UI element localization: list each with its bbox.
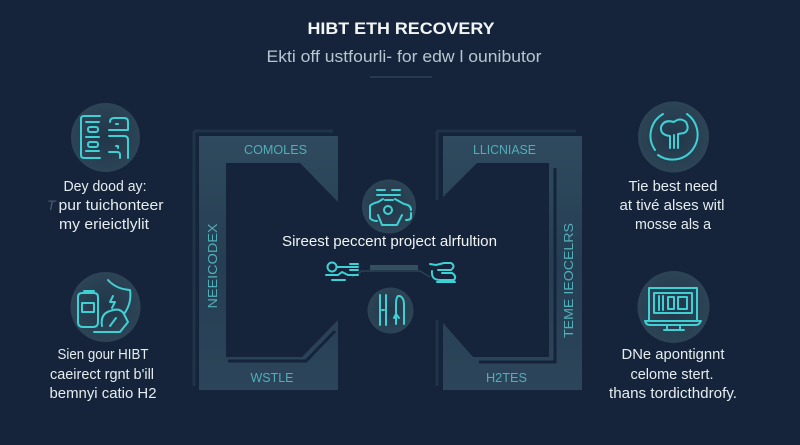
text: top left: pur tuichonteer (58, 197, 164, 214)
text: bottom left (50, 346, 156, 402)
text: bottom left: Sien gour HIBT (58, 346, 148, 363)
icon: server racks (71, 103, 140, 172)
label: right side: TEME IEOCELRS (561, 223, 576, 338)
text: bottom left: caeirect rgnt b'ill (50, 366, 154, 383)
left bracket panel (194, 131, 338, 390)
subtitle: Ekti off ustfourli- for edw l ounibutor (266, 47, 542, 66)
center text: Sireest peccent project alrfultion (282, 233, 497, 250)
icon: circular head (638, 102, 709, 172)
title: HIBT ETH RECOVERY (308, 20, 494, 38)
text: bottom right: DNe apontignnt (622, 346, 725, 363)
text: bottom right (609, 346, 737, 402)
text: bottom right: celome stert. (630, 366, 714, 383)
icon: bottom bars (368, 288, 414, 334)
text: top right (620, 178, 724, 233)
text: top left: Dey dood ay: (64, 178, 146, 195)
connector line (352, 268, 430, 277)
text: top left: T (47, 197, 57, 213)
icon: key left (326, 262, 358, 280)
label: bottom left: WSTLE (250, 370, 294, 385)
text: top right: mosse als a (635, 216, 712, 233)
text: top right: Tie best need (628, 178, 718, 195)
text: bottom left: bemnyi catio H2 (50, 385, 156, 402)
text: top right: at tivé alses witl (620, 197, 724, 214)
icon: laptop (638, 271, 710, 343)
icon: chain right (430, 263, 455, 282)
label: bottom right: H2TES (486, 370, 527, 385)
text: top left: my erieictlylit (59, 216, 150, 233)
label: top left: COMOLES (244, 142, 307, 157)
text: bottom right: thans tordicthdrofy. (609, 385, 737, 402)
icon: engine (362, 180, 416, 234)
text: top left (47, 178, 164, 233)
label: left side: NEEICODEX (205, 223, 220, 308)
right bracket panel (437, 131, 582, 390)
icon: battery and energy (70, 272, 140, 342)
label: top right: LLICNIASE (473, 142, 536, 157)
